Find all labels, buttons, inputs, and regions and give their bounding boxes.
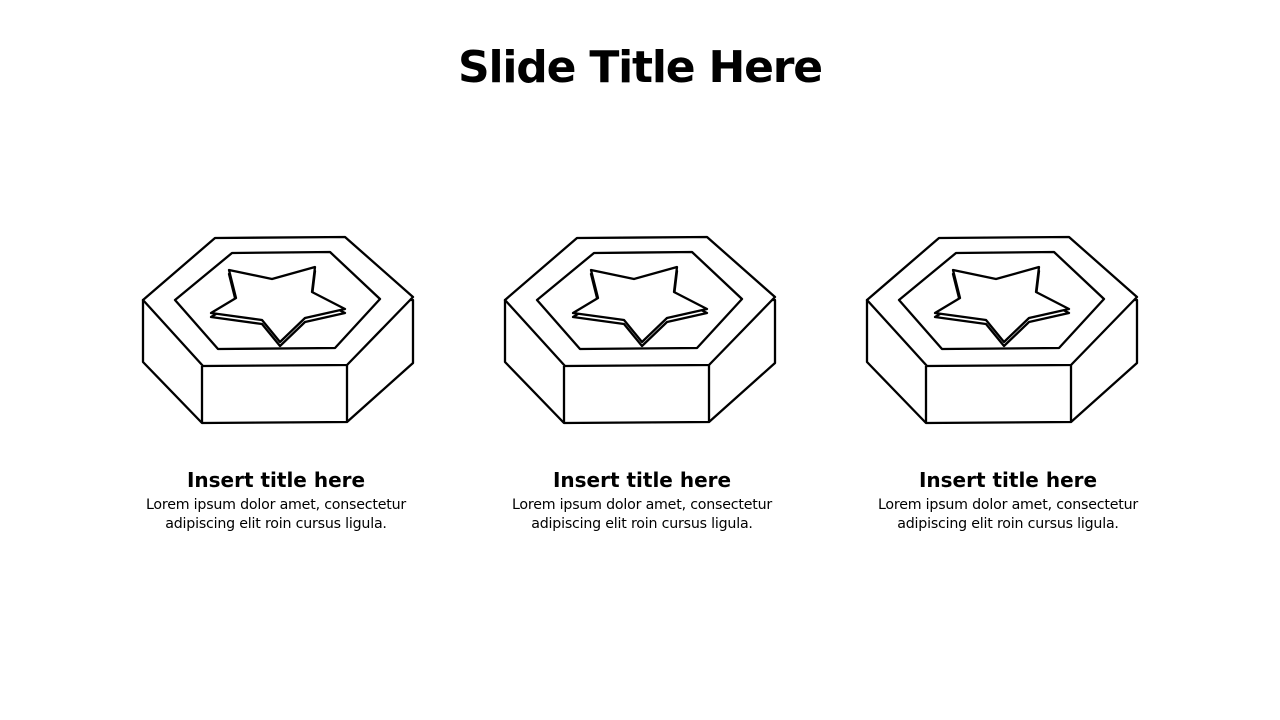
text block 3 <box>878 468 1138 532</box>
text block 1: Lorem ipsum dolor amet, consectetur <box>146 497 406 513</box>
icon: hexagon star 3 <box>867 237 1137 423</box>
text block 3: adipiscing elit roin cursus ligula. <box>897 516 1119 532</box>
icon: hexagon star 1 <box>143 237 413 423</box>
text block 1: adipiscing elit roin cursus ligula. <box>165 516 387 532</box>
text block 2 <box>512 468 772 532</box>
text block 1 <box>146 468 406 532</box>
text block 3: Lorem ipsum dolor amet, consectetur <box>878 497 1138 513</box>
text block 2: Lorem ipsum dolor amet, consectetur <box>512 497 772 513</box>
text block 1: Insert title here <box>187 468 365 492</box>
text block 3: Insert title here <box>919 468 1097 492</box>
text block 2: Insert title here <box>553 468 731 492</box>
icon: hexagon star 2 <box>505 237 775 423</box>
title: Slide Title Here <box>458 42 822 93</box>
text block 2: adipiscing elit roin cursus ligula. <box>531 516 753 532</box>
